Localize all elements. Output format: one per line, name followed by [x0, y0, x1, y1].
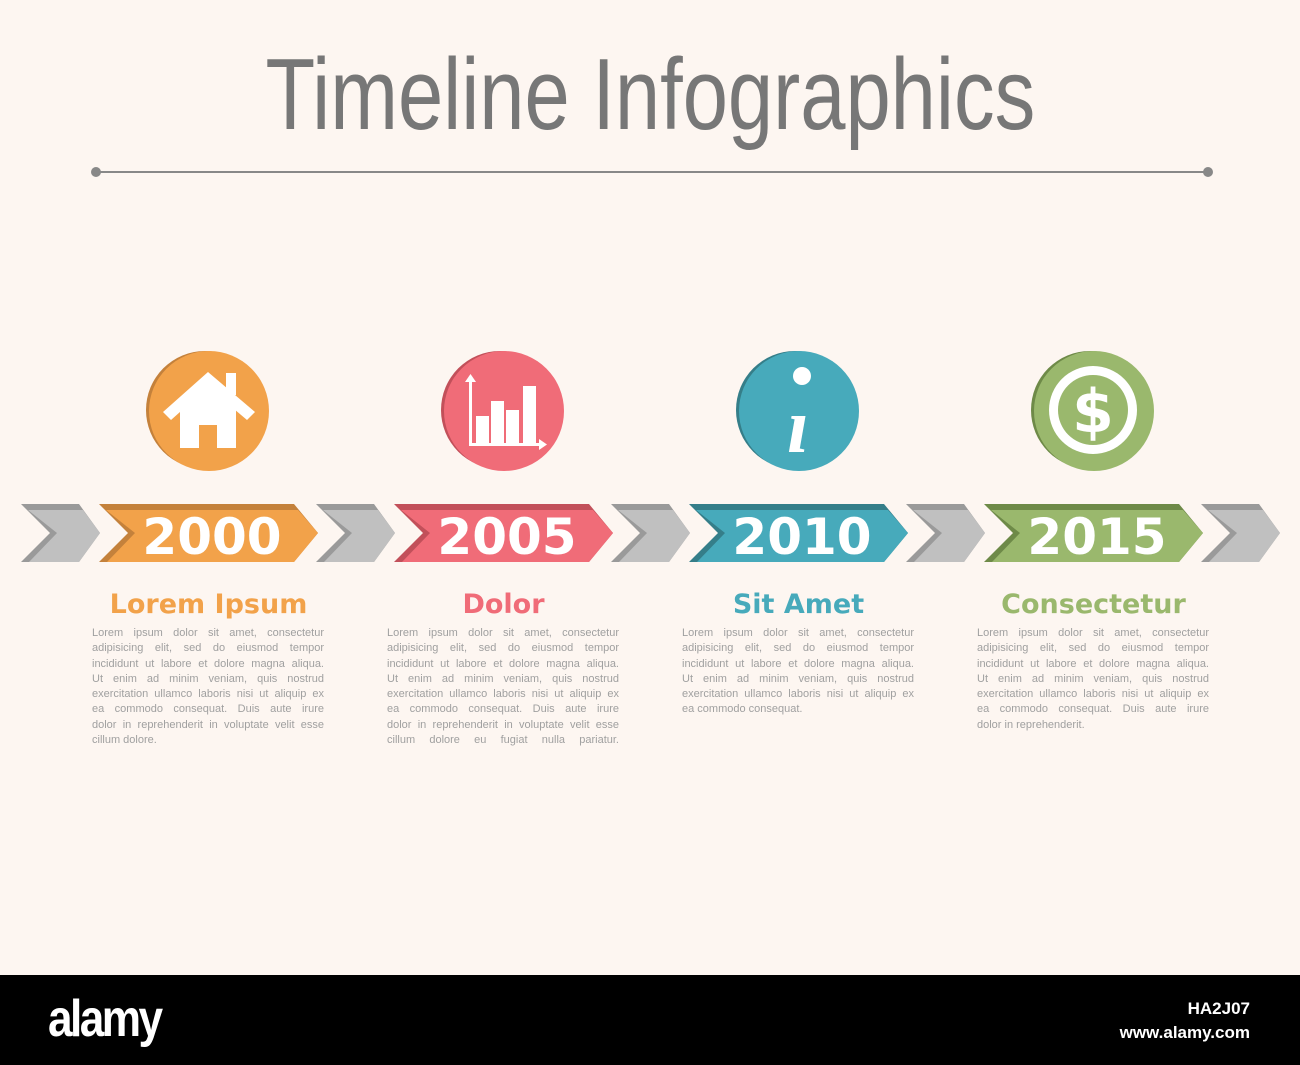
text block 3: Ut enim ad minim veniam, quis nostrud — [682, 673, 914, 685]
footer id: HA2J07 — [1188, 999, 1250, 1018]
heading: Consectetur: Consectetur — [1001, 589, 1186, 620]
arrow 2000: 2000 — [142, 508, 282, 566]
arrow 2005 — [394, 504, 613, 566]
text block 2: Ut enim ad minim veniam, quis nostrud — [387, 673, 619, 685]
text block 1: incididunt ut labore et dolore magna aliqua. — [92, 658, 324, 670]
text block 2: Lorem ipsum dolor sit amet, consectetur — [387, 627, 619, 639]
icon: dollar coin: $ — [1072, 377, 1114, 447]
text block 1: Ut enim ad minim veniam, quis nostrud — [92, 673, 324, 685]
text block 2 — [387, 627, 619, 746]
text block 4: Ut enim ad minim veniam, quis nostrud — [977, 673, 1209, 685]
arrow 2010: 2010 — [732, 508, 872, 566]
text block 2: exercitation ullamco laboris nisi ut aliquip ex — [387, 688, 619, 700]
text block 1 — [92, 627, 324, 746]
text block 4: exercitation ullamco laboris nisi ut aliquip ex — [977, 688, 1209, 700]
text block 3: Lorem ipsum dolor sit amet, consectetur — [682, 627, 914, 639]
arrow 2000 — [99, 504, 318, 566]
text block 2: cillum dolore eu fugiat nulla pariatur. — [387, 734, 619, 746]
arrow 2015: 2015 — [1027, 508, 1167, 566]
text block 1: ea commodo consequat. Duis aute irure — [92, 703, 324, 715]
text block 4: ea commodo consequat. Duis aute irure — [977, 703, 1209, 715]
text block 2: ea commodo consequat. Duis aute irure — [387, 703, 619, 715]
heading: Dolor: Dolor — [462, 589, 545, 620]
text block 2: incididunt ut labore et dolore magna aliqua. — [387, 658, 619, 670]
text block 3: exercitation ullamco laboris nisi ut aliquip ex — [682, 688, 914, 700]
icon: dollar coin — [1031, 351, 1154, 471]
text block 1: exercitation ullamco laboris nisi ut aliquip ex — [92, 688, 324, 700]
text block 3: incididunt ut labore et dolore magna aliqua. — [682, 658, 914, 670]
text block 4: dolor in reprehenderit. — [977, 719, 1085, 731]
heading: Sit Amet: Sit Amet — [733, 589, 864, 620]
title: Timeline Infographics — [266, 39, 1035, 151]
text block 1: adipisicing elit, sed do eiusmod tempor — [92, 642, 324, 654]
timeline arrows — [21, 504, 1280, 566]
text block 1: dolor in reprehenderit in voluptate velit esse — [92, 719, 324, 731]
arrow 2005: 2005 — [437, 508, 577, 566]
text block 2: dolor in reprehenderit in voluptate velit esse — [387, 719, 619, 731]
text block 3: adipisicing elit, sed do eiusmod tempor — [682, 642, 914, 654]
icon: info: ı — [787, 382, 809, 469]
footer id: www.alamy.com — [1120, 1023, 1250, 1042]
text block 4: adipisicing elit, sed do eiusmod tempor — [977, 642, 1209, 654]
text block 1: cillum dolore. — [92, 734, 157, 746]
footer logo: alamy — [48, 990, 161, 1048]
arrow 2010 — [689, 504, 908, 566]
arrow 2015 — [984, 504, 1203, 566]
gray chevrons — [21, 504, 1280, 562]
icon: house — [146, 351, 269, 471]
footer bar — [0, 975, 1300, 1065]
text block 4 — [977, 627, 1209, 731]
text block 4: Lorem ipsum dolor sit amet, consectetur — [977, 627, 1209, 639]
footer id — [1120, 999, 1250, 1042]
text block 1: Lorem ipsum dolor sit amet, consectetur — [92, 627, 324, 639]
text block 2: adipisicing elit, sed do eiusmod tempor — [387, 642, 619, 654]
text block 3: ea commodo consequat. — [682, 703, 802, 715]
text block 3 — [682, 627, 914, 715]
text block 4: incididunt ut labore et dolore magna aliqua. — [977, 658, 1209, 670]
icon: info — [736, 351, 859, 471]
heading: Lorem Ipsum: Lorem Ipsum — [110, 589, 307, 620]
icon: bar chart — [441, 351, 564, 471]
